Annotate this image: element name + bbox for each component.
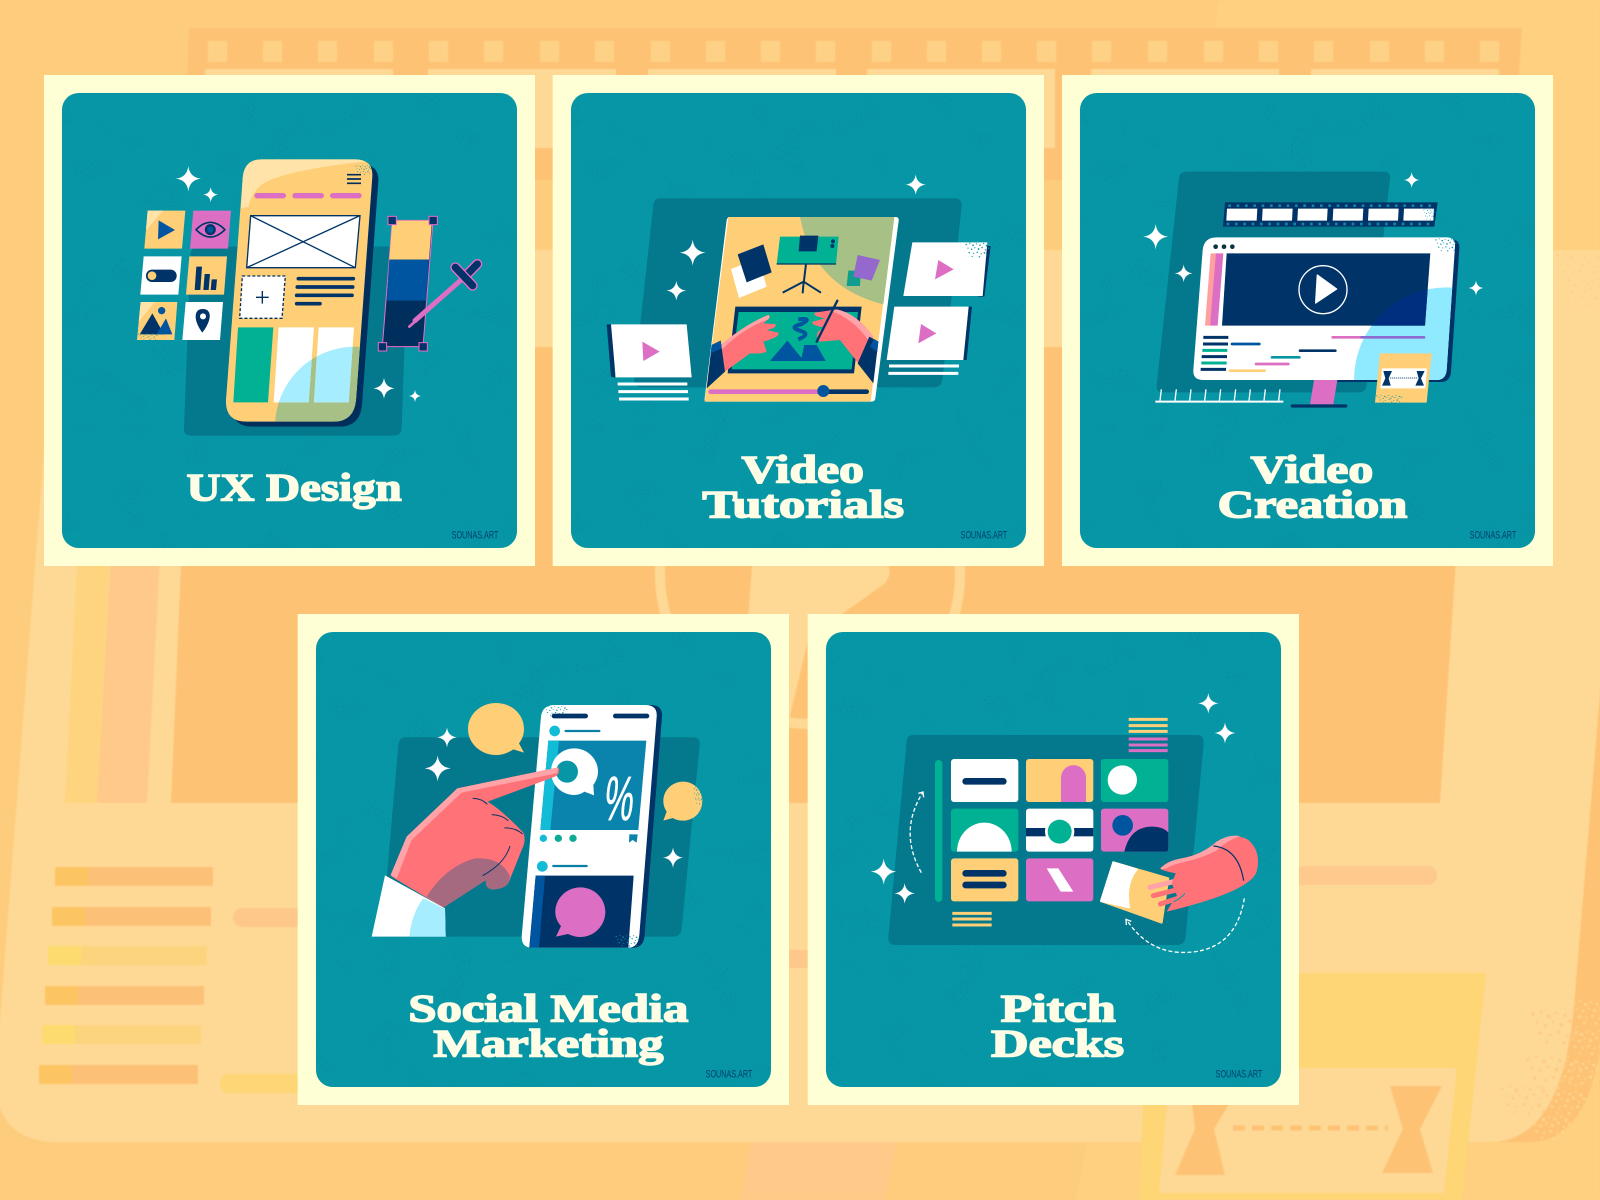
text line stacks [952,719,1168,925]
title: UX Design: UX Design [187,468,402,510]
timeline ruler [1155,389,1283,402]
speech bubble yellow right [663,782,703,821]
phone feed: % [601,764,639,834]
panel: Video Creation [1062,75,1553,566]
video progress slider [711,385,867,397]
clip thumbnail card [1375,353,1432,403]
sparkles [871,693,1236,904]
credit: SOUNAS.ART [706,1069,753,1081]
panel: Pitch Decks [808,614,1299,1105]
backdrop shape [382,737,700,937]
icon: colour dropper [409,264,477,327]
panel: UX Design [44,75,535,566]
credit: SOUNAS.ART [961,530,1008,542]
icon tiles [137,211,231,340]
video tile left [607,324,692,399]
video tile top right [903,242,991,297]
speech bubble yellow left [468,703,524,755]
title: Video Tutorials: Tutorials [702,484,904,526]
panel: Video Tutorials [553,75,1044,566]
sparkles [1143,172,1484,296]
title: Video Creation [1218,449,1407,526]
backdrop shape [888,735,1204,945]
video tile lower right [887,307,972,373]
hands on tablet [707,301,878,388]
title: Video Tutorials: Video [742,449,864,491]
colour swatch strip [378,216,437,351]
main video document [705,217,899,402]
sparkles [425,727,683,868]
film strip [1223,202,1438,227]
title: Pitch Decks: Decks [991,1023,1124,1065]
backdrop shape [1157,172,1390,392]
slide grid [935,759,1168,902]
backdrop shape [634,198,962,387]
arrow: dashed curve left [910,792,924,873]
title: Video Tutorials [702,449,904,526]
title: Pitch Decks: Pitch [1001,988,1116,1030]
reaching hand [1150,836,1258,912]
title: Video Creation: Creation [1218,484,1407,526]
phone feed [522,705,662,948]
arrow: dashed curve right [1126,898,1244,952]
sparkles [666,174,926,301]
credit: SOUNAS.ART [1470,530,1517,542]
panel: Social Media Marketing [298,614,789,1105]
title: Social Media Marketing [408,988,688,1065]
title: Video Creation: Video [1251,449,1373,491]
sparkles [176,166,421,402]
backdrop shape [184,247,408,436]
title: Social Media Marketing: Marketing [433,1023,663,1065]
pointing hand with sleeve [372,767,559,937]
title: Social Media Marketing: Social Media [408,988,688,1030]
monitor [1193,237,1460,408]
title: Pitch Decks [991,988,1124,1065]
phone wireframe [226,159,378,427]
dragged slide card [1101,862,1168,923]
credit: SOUNAS.ART [452,530,499,542]
credit: SOUNAS.ART [1216,1069,1263,1081]
